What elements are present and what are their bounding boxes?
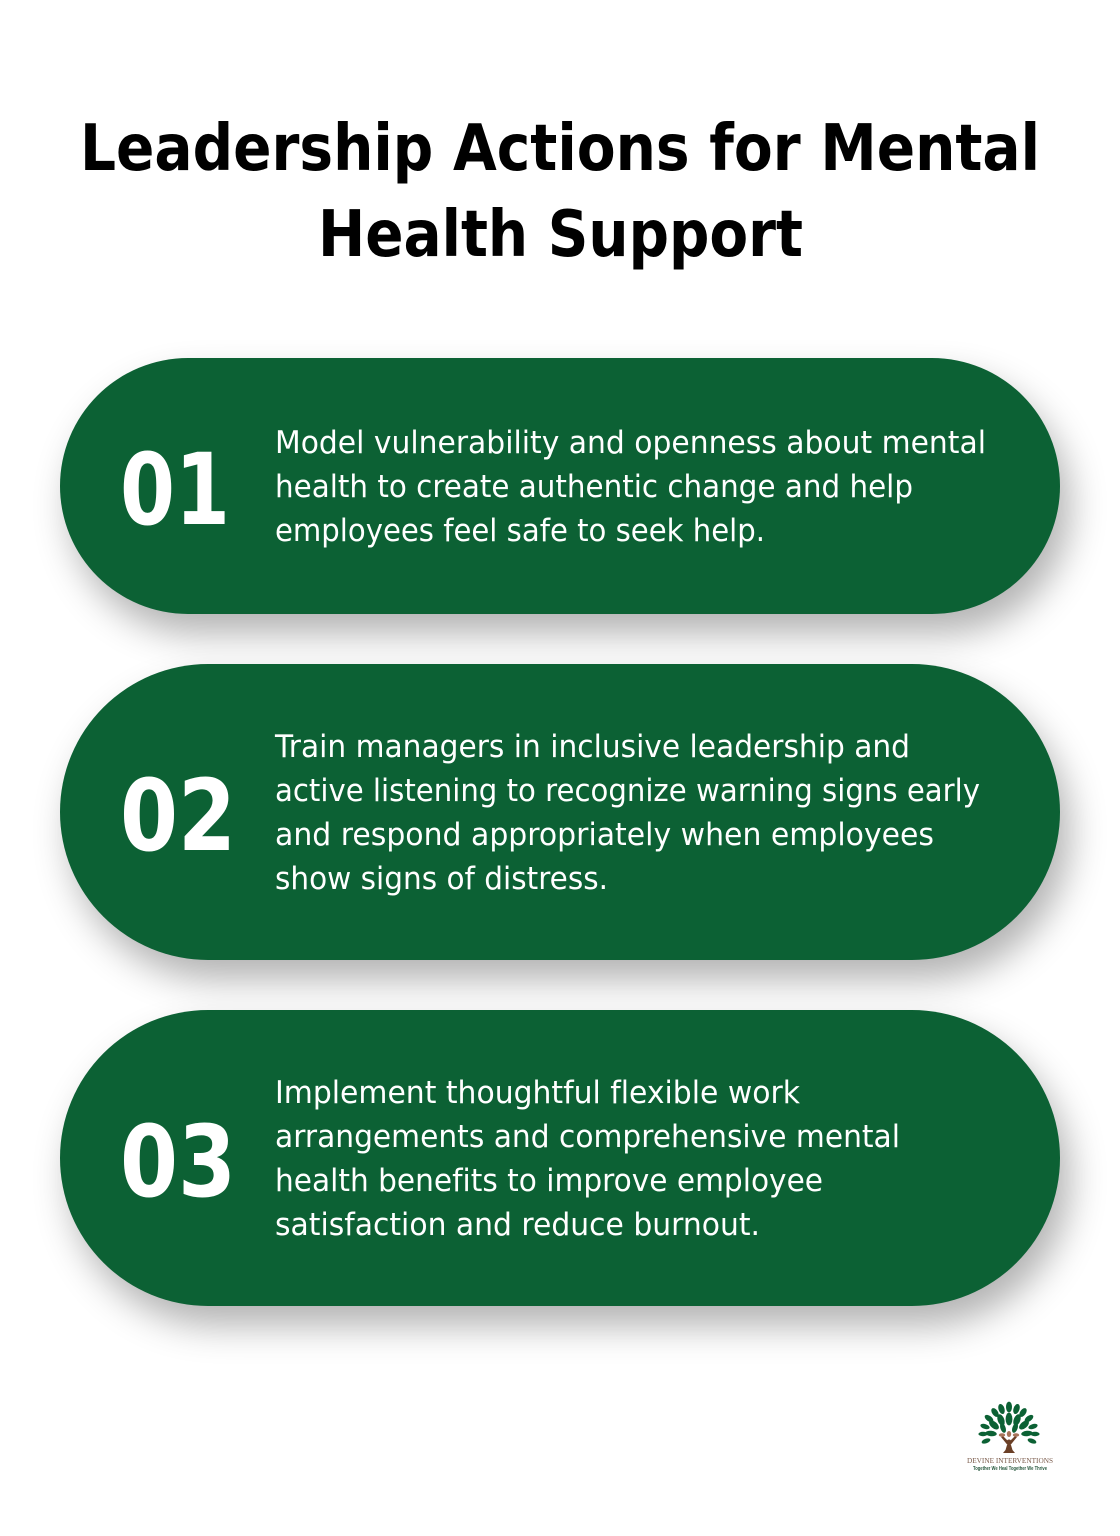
step 02 description: active listening to recognize warning signs early (275, 773, 980, 809)
step 03 description: arrangements and comprehensive mental (275, 1119, 900, 1155)
step 02 description: show signs of distress. (275, 861, 608, 897)
step number 02: 02 (120, 759, 236, 874)
step 02 description (274, 729, 980, 897)
step 03 description (275, 1075, 900, 1243)
panel: step 01 (60, 358, 1060, 614)
step 01 description: health to create authentic change and help (275, 469, 913, 505)
step 02 description: and respond appropriately when employees (275, 817, 934, 853)
panel: step 02 (60, 664, 1060, 960)
logo name: DEVINE INTERVENTIONS (967, 1456, 1053, 1465)
step 03 description: health benefits to improve employee (275, 1163, 823, 1199)
step number 03: 03 (120, 1105, 236, 1220)
icon: tree trunk figure (999, 1431, 1019, 1453)
step 03 description: satisfaction and reduce burnout. (275, 1207, 760, 1243)
step 01 description: Model vulnerability and openness about mental (275, 425, 986, 461)
step 01 description (275, 425, 986, 549)
title: Health Support (318, 198, 803, 272)
step 03 description: Implement thoughtful flexible work (275, 1075, 801, 1111)
logo tagline: Together We Heal Together We Thrive (973, 1466, 1047, 1472)
step 02 description: Train managers in inclusive leadership and (274, 729, 910, 765)
icon: tree leaves (978, 1402, 1040, 1445)
logo: Devine Interventions (967, 1402, 1053, 1472)
panel: step 03 (60, 1010, 1060, 1306)
step 01 description: employees feel safe to seek help. (275, 513, 765, 549)
step number 01: 01 (120, 433, 230, 548)
title (80, 112, 1040, 272)
